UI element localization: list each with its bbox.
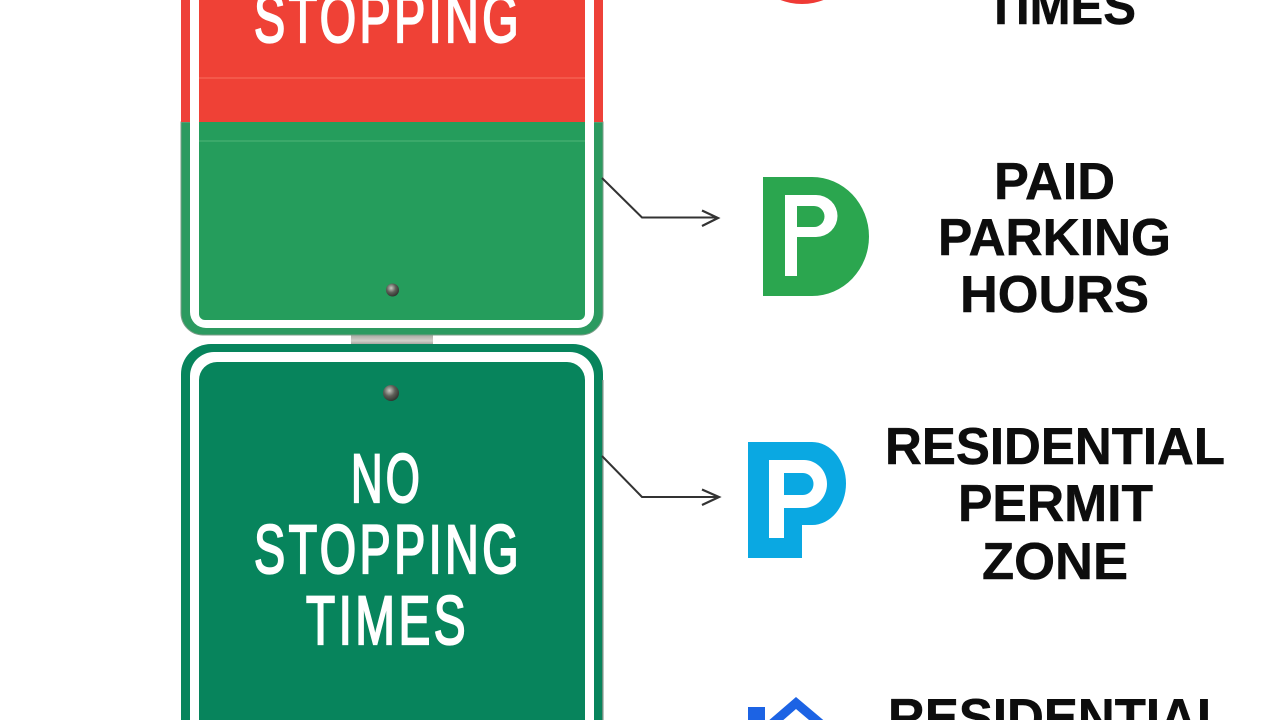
sign connector bracket (351, 333, 433, 346)
arrow: green sign to paid parking (602, 178, 718, 226)
white inset border (190, 352, 594, 720)
green panel (199, 362, 585, 720)
white inset border (190, 0, 594, 328)
icon: blue house, cropped at bottom (748, 697, 828, 720)
icon: residential permit blue P (748, 442, 846, 558)
green panel (199, 122, 585, 320)
icon: red circle, cropped at top (742, 0, 862, 4)
panel: upper split red and green sign (181, 0, 603, 335)
sign text: no stopping times: NO (351, 440, 423, 517)
rivet (386, 284, 399, 296)
red panel (199, 0, 585, 122)
rivet (383, 385, 399, 401)
arrow: lower sign to residential permit zone (602, 456, 719, 505)
label: paid parking hours (938, 153, 1171, 324)
panel: lower green no stopping times sign (181, 344, 604, 720)
label: paid parking hours: PAID (994, 153, 1115, 211)
label: residential permit zone: RESIDENTIAL (885, 418, 1225, 476)
label: paid parking hours: PARKING (938, 209, 1171, 267)
sign text: no stopping times: TIMES (306, 582, 469, 659)
icon: paid parking green P (763, 177, 869, 296)
label: residential permit zone: ZONE (982, 533, 1128, 591)
sign text: no stopping times: STOPPING (254, 511, 522, 588)
red sign body (181, 0, 603, 122)
label: residential permit zone: PERMIT (958, 475, 1153, 533)
label: paid parking hours: HOURS (960, 266, 1149, 324)
sign text: no stopping times (254, 440, 522, 659)
label: residential permit zone (885, 418, 1225, 591)
green sign body (181, 122, 603, 335)
outer sign body (181, 344, 603, 720)
